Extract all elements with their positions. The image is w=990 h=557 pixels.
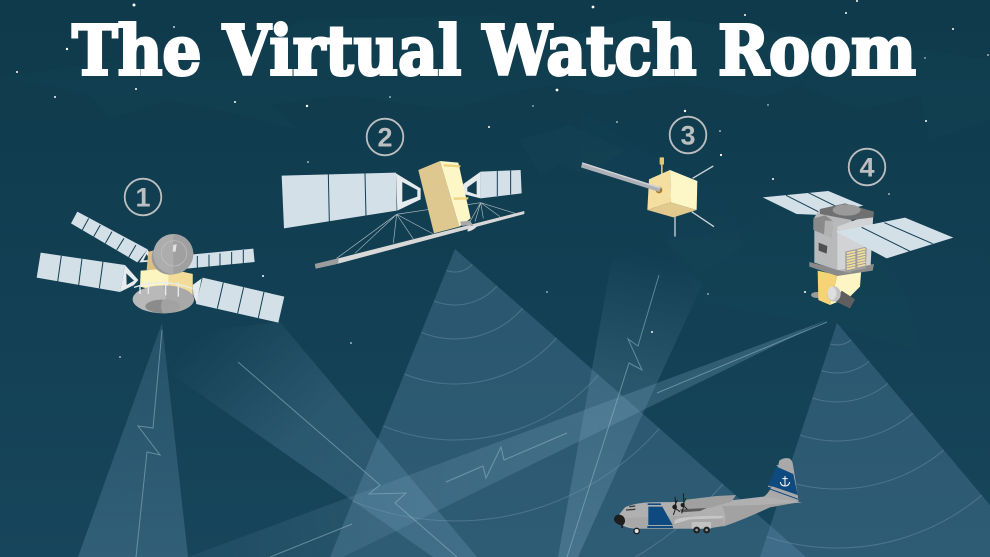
boom [581,162,662,193]
main bus [814,203,874,273]
number badge 3: 3 [680,120,696,150]
panel connectors [120,249,202,303]
cockpit windows [626,506,635,510]
signal arcs: satellite 4 [766,340,982,548]
number badge 3 [670,117,706,153]
boom joint [460,221,477,232]
whisker antennas [675,166,714,237]
fuselage [615,497,802,529]
yellow instrument module [811,269,861,305]
lightning bolt: satellite 1 to plane [238,362,457,557]
beam: satellite 1 narrow cone [78,323,188,557]
main body [140,269,193,298]
solar panels [37,212,284,323]
satellite 4 [763,191,953,308]
dark hatch [819,243,827,254]
front solar panel [836,218,953,258]
satellite 1 [37,212,284,323]
boom [315,211,524,269]
lightning bolt: satellite 4 [270,322,827,557]
number badge 1 [125,179,161,215]
number badge 2 [367,119,403,155]
parabolic antenna [152,234,193,275]
background: faint world map landmasses [0,15,990,352]
base dish [133,285,194,313]
panel connectors [396,172,481,211]
title: The Virtual Watch Room [72,12,916,92]
lightning bolt: satellite 1 downlink [136,330,162,557]
satellite 3 [581,157,714,237]
railing [134,280,193,297]
number badge 1: 1 [135,182,151,212]
tail fin [747,458,799,503]
left solar panel [282,173,397,228]
base plate [809,262,874,276]
stars [16,0,989,358]
radiator grill [845,247,867,273]
signal arcs: satellite 2 [352,264,723,557]
side box [813,215,833,238]
tan mast [147,250,187,270]
nose [614,514,625,525]
number badge 4: 4 [859,152,875,182]
rear solar panel [763,191,863,215]
right solar panel [481,170,522,198]
body [418,161,471,233]
anchor emblem [780,476,790,486]
landing gear [621,522,711,534]
beam: rising to satellite 3 [558,250,703,557]
number badge 4 [849,149,885,185]
beam: satellite 1 wide beam [165,322,477,557]
blue stripe [647,503,673,528]
beam: rising to satellite 4 [188,320,827,557]
satellite 2 [282,161,524,269]
lightning bolt: satellite 3 [567,275,659,557]
number badge 2: 2 [377,122,393,152]
beam: satellite 4 cone [760,323,990,557]
cube body [647,170,697,217]
aircraft [614,458,802,534]
camera [827,286,855,308]
beam: satellite 2 cone [330,249,806,557]
support wires [337,203,515,258]
top antenna [660,157,664,176]
wing and engines [672,493,736,515]
